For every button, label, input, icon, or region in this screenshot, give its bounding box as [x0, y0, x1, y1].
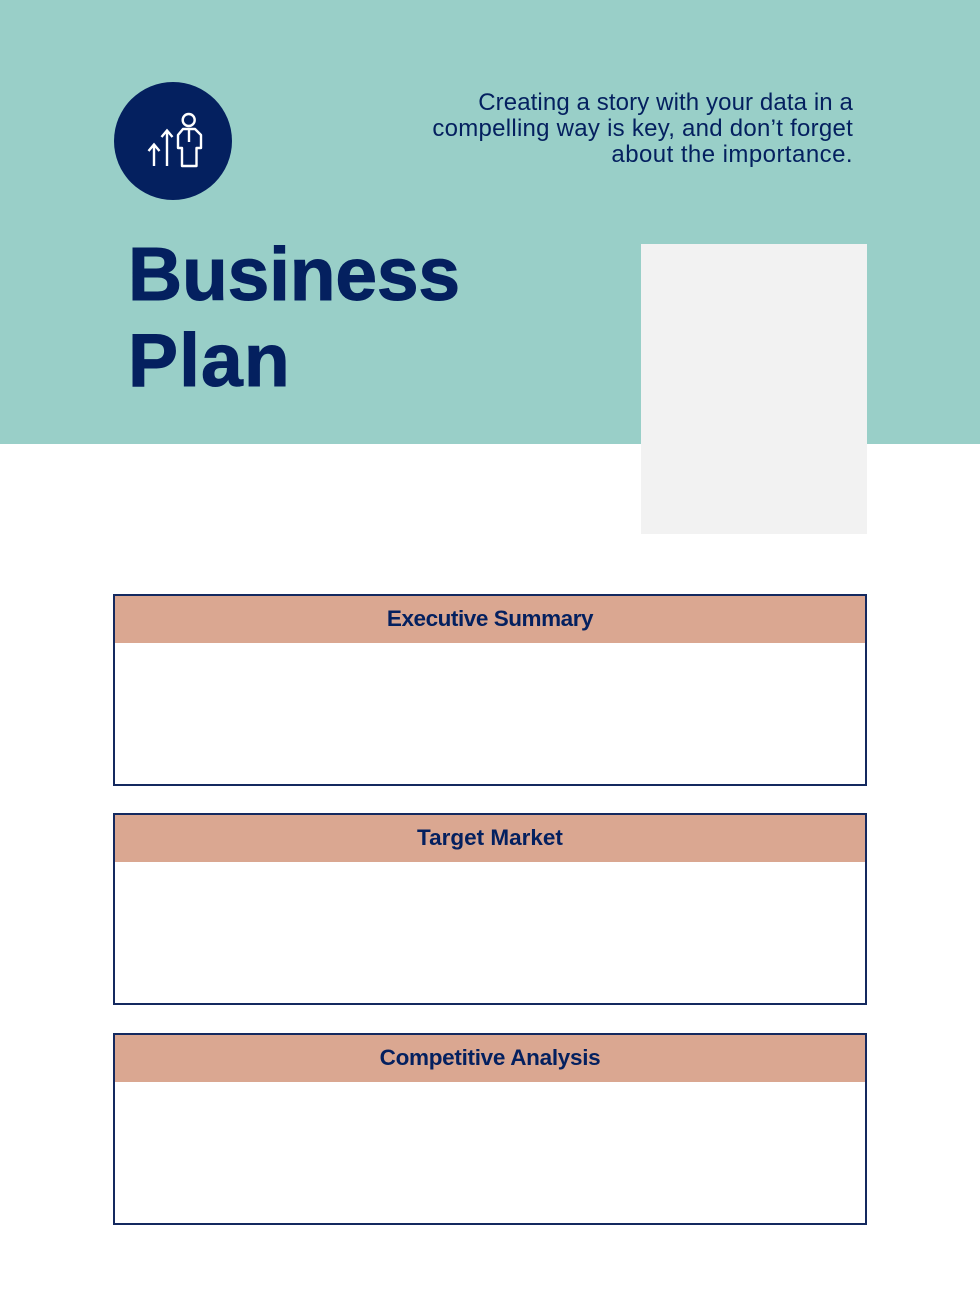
- intro text: [432, 89, 853, 168]
- heading: competitive analysis: [115, 1035, 865, 1082]
- icon: person with rising arrows: [114, 82, 232, 200]
- intro text: about the importance.: [611, 141, 853, 168]
- title: [128, 232, 460, 402]
- intro text: Creating a story with your data in a: [478, 89, 853, 116]
- heading: executive summary: Executive Summary: [387, 606, 593, 631]
- heading: executive summary: [115, 596, 865, 643]
- panel: target market: [113, 813, 867, 1005]
- panel: competitive analysis: [113, 1033, 867, 1225]
- title: Business: [128, 232, 460, 316]
- panel: executive summary: [113, 594, 867, 786]
- intro text: compelling way is key, and don’t forget: [432, 115, 853, 142]
- heading: competitive analysis: Competitive Analysis: [380, 1045, 600, 1070]
- header band: [0, 0, 980, 444]
- heading: target market: [115, 815, 865, 862]
- title: Plan: [128, 318, 291, 402]
- heading: target market: Target Market: [417, 825, 563, 850]
- image placeholder: [641, 244, 867, 534]
